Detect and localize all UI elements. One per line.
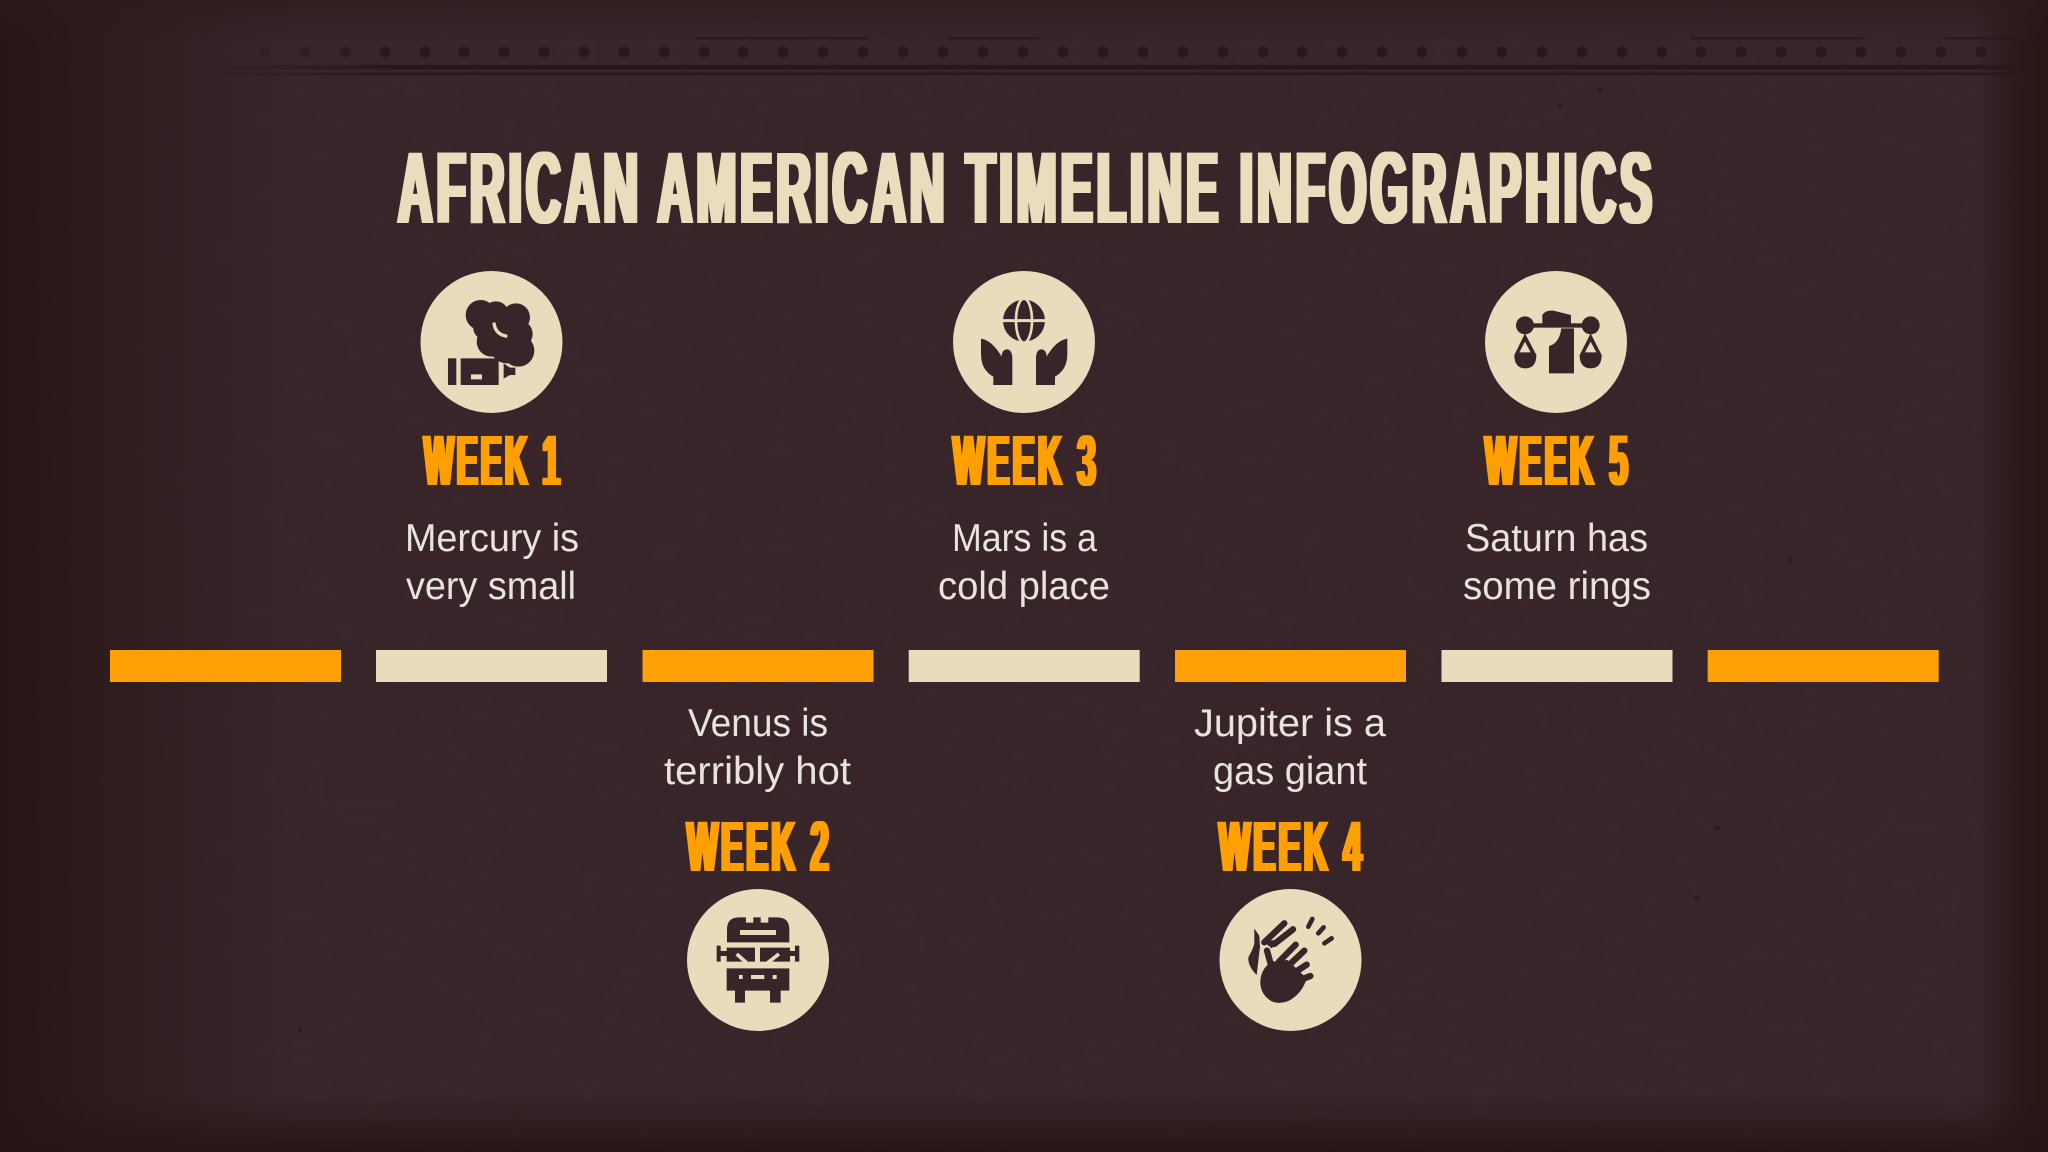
text: WEEK 1	[424, 422, 563, 501]
icon: smoking cannon	[420, 271, 562, 413]
milestone: week 1	[405, 271, 579, 608]
week 3 description: Mars is a	[952, 517, 1097, 560]
milestone: week 4: WEEK 4	[1219, 808, 1365, 887]
milestone: week 3	[938, 271, 1110, 608]
week 4 description	[1194, 702, 1386, 793]
icon: clapping hands	[1220, 889, 1362, 1031]
week 1 description: Mercury is	[405, 517, 579, 560]
decorative top band: dots and rules	[225, 37, 2015, 75]
milestone: week 4	[1194, 702, 1386, 1031]
timeline bar segments	[110, 650, 1939, 682]
week 4 description: Jupiter is a	[1194, 702, 1386, 745]
milestone: week 2	[664, 702, 851, 1031]
week 1 description	[405, 517, 579, 608]
icon: hands holding globe	[953, 271, 1095, 413]
week 4 description: gas giant	[1213, 750, 1367, 793]
week 2 description	[664, 702, 851, 793]
week 3 description	[938, 517, 1110, 608]
milestone: week 2: WEEK 2	[687, 808, 832, 887]
week 3 description: cold place	[938, 565, 1110, 608]
week 5 description	[1463, 517, 1651, 608]
week 2 description: Venus is	[688, 702, 828, 745]
milestone: week 5	[1463, 271, 1651, 608]
icon: scales of justice	[1485, 271, 1627, 413]
text: WEEK 3	[953, 422, 1099, 501]
milestone: week 5: WEEK 5	[1485, 422, 1631, 501]
week 2 description: terribly hot	[664, 750, 851, 793]
week 1 description: very small	[406, 565, 576, 608]
week 5 description: some rings	[1463, 565, 1651, 608]
icon: armoured mask	[687, 889, 829, 1031]
week 5 description: Saturn has	[1465, 517, 1648, 560]
